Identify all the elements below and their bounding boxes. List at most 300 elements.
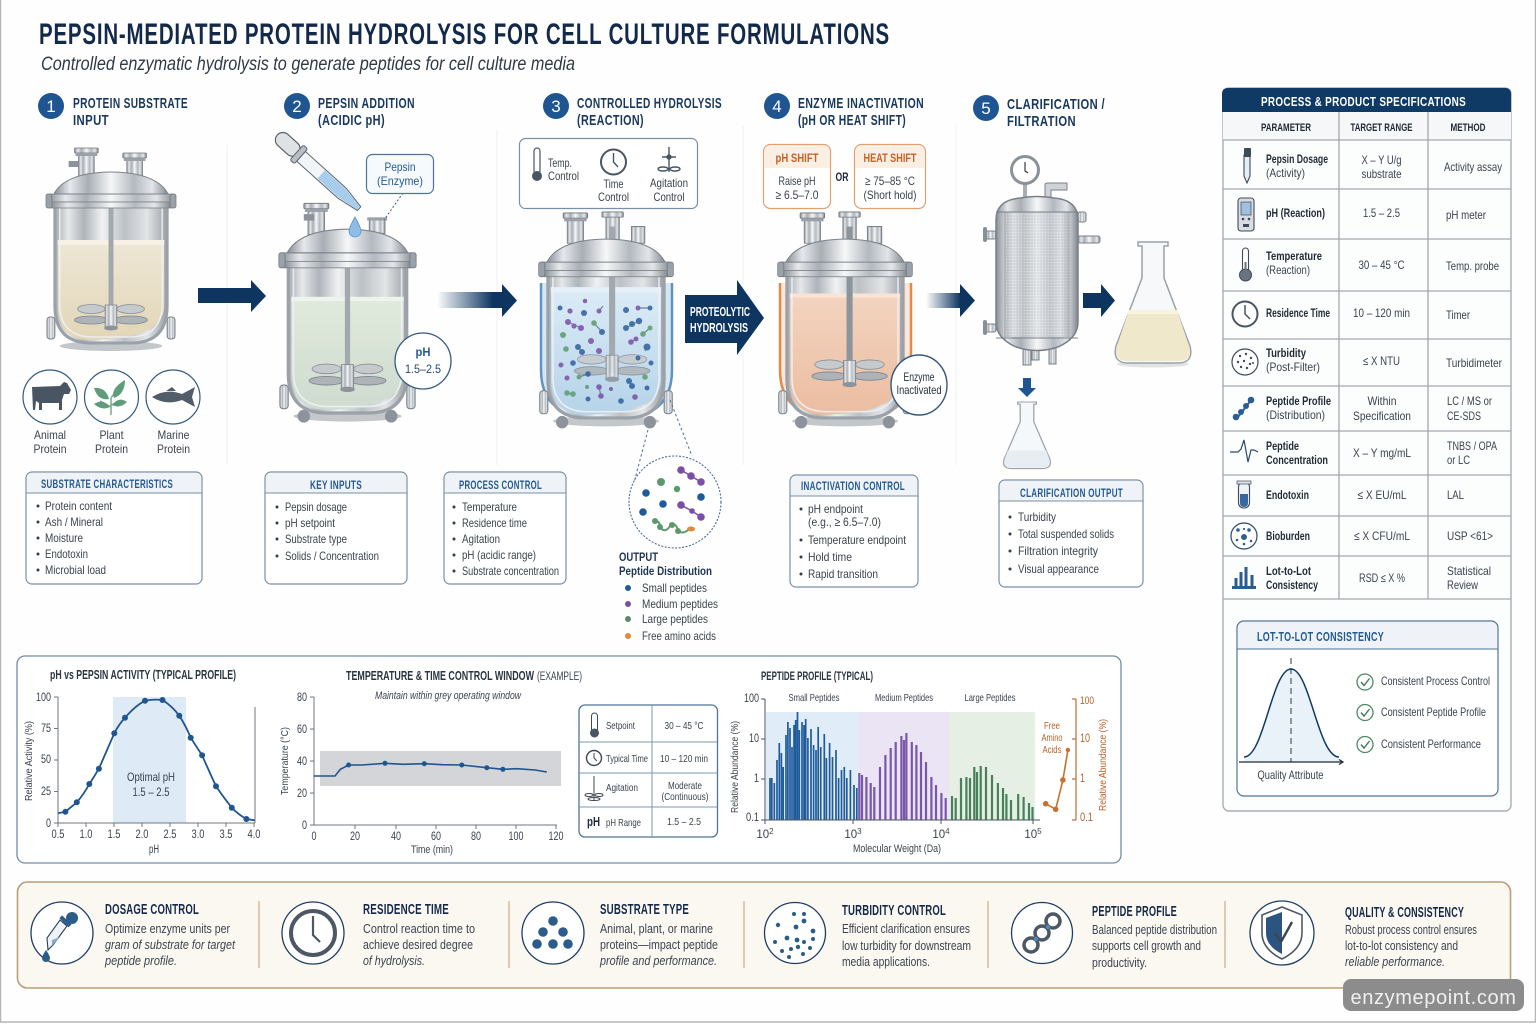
table: operating window (579, 705, 718, 837)
panel: inactivation control: pH endpoint (808, 502, 864, 516)
chart: temperature and time window: 20 (297, 788, 307, 800)
title: PEPSIN-MEDIATED PROTEIN HYDROLYSIS FOR CELL CULTURE FORMULATIONS (39, 18, 890, 51)
protein labels: Marine (158, 428, 190, 442)
pH shift box: ≥ 6.5–7.0 (776, 188, 819, 202)
chart: peptide profile: 5 (1037, 827, 1042, 836)
down arrow (1018, 378, 1036, 397)
chart: pH vs pepsin activity: 2.0 (136, 829, 148, 841)
table header bar: PROCESS & PRODUCT SPECIFICATIONS (1261, 94, 1466, 109)
chart: pH vs pepsin activity: 3.5 (220, 829, 232, 841)
chart: pH vs pepsin activity (23, 668, 260, 856)
icon: setpoint thermometer (590, 713, 599, 738)
chart: pH vs pepsin activity: 1.5 (108, 829, 120, 841)
item: peptide profile: PEPTIDE PROFILE (1092, 904, 1177, 920)
heat shift box: (Short hold) (864, 188, 916, 202)
icon: agitation (585, 776, 603, 800)
step 3 heading (543, 93, 722, 129)
panel: substrate characteristics (26, 472, 202, 584)
panel: key inputs (265, 472, 407, 584)
chart: peptide profile: Medium Peptides (875, 692, 933, 704)
icon: clock (601, 150, 626, 174)
panel: reaction controls: Control (654, 190, 684, 204)
panel: charts (17, 656, 1121, 863)
protein labels: Protein (95, 442, 128, 456)
step 4 heading: 4 (772, 97, 782, 116)
panel: process control: PROCESS CONTROL (459, 480, 542, 492)
table header bar (1222, 88, 1511, 112)
item: peptide profile: productivity. (1092, 955, 1147, 970)
item: residence time (282, 902, 475, 968)
item: turbidity control: media applications. (842, 954, 930, 969)
item: substrate type: proteins—impact peptide (600, 937, 718, 952)
step 3 heading: (REACTION) (577, 112, 644, 129)
icon: thermometer (532, 148, 542, 181)
chart: temperature and time window: 120 (548, 831, 564, 843)
step 4 heading: (pH OR HEAT SHIFT) (798, 112, 906, 129)
row: pepsin dosage: X – Y U/g (1362, 153, 1402, 167)
column headers: PARAMETER (1261, 122, 1311, 134)
big flask (1115, 242, 1191, 368)
panel: process control: Temperature (462, 500, 517, 514)
item: turbidity control: TURBIDITY CONTROL (842, 903, 946, 919)
panel: clarification output: Total suspended solids (1018, 527, 1114, 541)
panel: lot-to-lot consistency (1237, 621, 1498, 796)
chart: peptide profile: 2 (769, 827, 774, 836)
arrow: proteolytic hydrolysis: PROTEOLYTIC (690, 305, 750, 319)
icon: typical time clock (586, 750, 602, 766)
row: bioburden (1231, 523, 1493, 549)
step 2 heading: 2 (292, 97, 302, 116)
row: endotoxin: Endotoxin (1266, 488, 1309, 502)
row: endotoxin: LAL (1447, 488, 1464, 502)
step 1 heading: INPUT (73, 112, 109, 129)
chart: temperature and time window: Time (min) (411, 844, 453, 856)
callout: pH range (395, 333, 451, 389)
panel: key inputs: Substrate type (285, 532, 347, 546)
chart: temperature and time window: 40 (297, 756, 307, 768)
item: substrate type: profile and performance. (599, 953, 717, 968)
row: temperature: Temperature (1266, 249, 1322, 263)
item: peptide profile: supports cell growth and (1092, 938, 1201, 953)
chart: pH vs pepsin activity: 4.0 (248, 829, 260, 841)
row: lot-to-lot consistency: RSD ≤ X % (1359, 571, 1405, 585)
chart: peptide profile (729, 671, 1109, 855)
panel: substrate characteristics: SUBSTRATE CHARACTERISTICS (41, 479, 173, 491)
chart: peptide profile: 100 (1080, 695, 1094, 707)
heat shift box: HEAT SHIFT (864, 151, 917, 165)
reactor 3: controlled hydrolysis (539, 212, 673, 428)
chart: temperature and time window: Temperature (°C) (279, 727, 291, 795)
chart: peptide profile: 100 (744, 693, 759, 705)
row: pepsin dosage: Pepsin Dosage (1266, 152, 1328, 166)
panel: inactivation control (790, 475, 918, 587)
icon: marine protein (146, 370, 200, 424)
arrow 2 (437, 284, 517, 317)
chart: temperature and time window: 100 (508, 831, 524, 843)
subtitle: Controlled enzymatic hydrolysis to generate peptides for cell culture media (41, 54, 575, 75)
row: turbidity: Turbidity (1266, 346, 1306, 360)
row: pH reaction: 1.5 – 2.5 (1363, 206, 1400, 220)
chart: peptide profile: Small Peptides (788, 692, 840, 704)
checklist (1357, 674, 1490, 752)
row: turbidity: Turbidimeter (1446, 356, 1502, 370)
table: operating window: Typical Time (606, 753, 648, 765)
row: peptide concentration: Concentration (1266, 453, 1328, 467)
panel: inactivation control: INACTIVATION CONTROL (801, 481, 905, 493)
row: peptide concentration: Peptide (1266, 439, 1299, 453)
step 4 heading: ENZYME INACTIVATION (798, 95, 924, 112)
chart: peptide profile: 0.1 (1080, 812, 1093, 824)
row: temperature (1240, 248, 1499, 281)
panel: process control: Residence time (462, 516, 527, 530)
magnifier dashed guides (632, 400, 692, 490)
chart: temperature and time window: 0 (312, 831, 316, 843)
row: temperature: (Reaction) (1266, 263, 1310, 277)
panel: clarification output: Turbidity (1018, 510, 1056, 524)
arrow 4 (926, 284, 975, 317)
item: substrate type: SUBSTRATE TYPE (600, 902, 689, 918)
panel: process control: pH (acidic range) (462, 548, 536, 562)
item: dosage control: DOSAGE CONTROL (105, 902, 199, 918)
chart: peptide profile: Free (1044, 720, 1060, 732)
row: turbidity: (Post-Filter) (1266, 360, 1320, 374)
panel: clarification output: Visual appearance (1018, 562, 1099, 576)
panel: clarification output: Filtration integrity (1018, 544, 1098, 558)
row: turbidity (1232, 346, 1502, 375)
icon: pepsin dropper (271, 128, 366, 216)
row: peptide profile: (Distribution) (1266, 408, 1325, 422)
protein labels: Animal (34, 428, 66, 442)
step 1 heading: 1 (46, 97, 56, 116)
chart: pH vs pepsin activity: 0.5 (52, 829, 64, 841)
row: lot-to-lot consistency: Review (1447, 578, 1478, 592)
arrow: proteolytic hydrolysis: HYDROLYSIS (690, 321, 748, 335)
chart: peptide profile: Relative Abundance (%) (729, 721, 741, 813)
icon: dropper (31, 902, 93, 964)
chart: peptide profile: 1 (754, 773, 759, 785)
row: residence time: Timer (1446, 308, 1470, 322)
panel: substrate characteristics: Ash / Mineral (45, 515, 103, 529)
chart: temperature and time window: 40 (391, 831, 401, 843)
panel: inactivation control: Temperature endpoint (808, 533, 907, 547)
step 1 heading (38, 93, 188, 129)
chart: pH vs pepsin activity: 25 (41, 786, 51, 798)
reactor 2: pepsin addition (279, 203, 416, 423)
step 2 heading: (ACIDIC pH) (318, 112, 385, 129)
item: quality and consistency: Robust process control ensures (1345, 922, 1477, 937)
output legend: Free amino acids (642, 629, 716, 643)
chart: pH vs pepsin activity: 2.5 (164, 829, 176, 841)
chart: pH vs pepsin activity: 1.0 (80, 829, 92, 841)
callout: pepsin enzyme (366, 154, 434, 220)
panel: key inputs: pH setpoint (285, 516, 336, 530)
pH shift box: pH SHIFT (776, 151, 819, 165)
icon: particles (764, 902, 826, 964)
panel: inactivation control: Hold time (808, 550, 852, 564)
step 5 heading (973, 95, 1105, 130)
icon: chain (1012, 902, 1072, 964)
item: turbidity control: Efficient clarification ensures (842, 921, 970, 936)
item: residence time: RESIDENCE TIME (363, 902, 449, 918)
chart: peptide profile: Molecular Weight (Da) (853, 843, 941, 855)
item: quality and consistency (1250, 901, 1477, 969)
row: pepsin dosage: (Activity) (1266, 166, 1305, 180)
row: bioburden: USP <61> (1447, 529, 1493, 543)
watermark: enzymepoint.com (1350, 987, 1516, 1009)
panel: reaction controls: Temp. (548, 156, 572, 170)
row: lot-to-lot consistency: Statistical (1447, 564, 1491, 578)
item: residence time: of hydrolysis. (363, 953, 425, 968)
chart: peptide profile: Relative Abundance (%) (1097, 719, 1109, 811)
chart: peptide profile: 10 (756, 829, 769, 841)
row: pepsin dosage (1244, 148, 1502, 183)
panel: process control: Substrate concentration (462, 564, 559, 578)
chart: temperature and time window: 60 (431, 831, 441, 843)
item: dosage control: peptide profile. (104, 953, 177, 968)
row: lot-to-lot consistency: Consistency (1266, 578, 1318, 592)
output legend: Peptide Distribution (619, 564, 712, 578)
chart: peptide profile: 10 (844, 829, 857, 841)
item: turbidity control: low turbidity for downstream (842, 938, 971, 953)
output legend: OUTPUT (619, 550, 659, 564)
row: lot-to-lot consistency (1232, 564, 1491, 592)
table: operating window: Moderate (668, 780, 702, 792)
chart: peptide profile: Large Peptides (964, 692, 1016, 704)
chart: pH vs pepsin activity: 1.5 – 2.5 (132, 785, 170, 799)
chart: peptide profile: 3 (857, 827, 862, 836)
chart: temperature and time window: TEMPERATURE & TIME CONTROL WINDOW (346, 669, 534, 683)
row: peptide profile: Peptide Profile (1266, 394, 1331, 408)
row: bioburden: ≤ X CFU/mL (1354, 529, 1410, 543)
table: operating window: 30 – 45 °C (664, 720, 704, 732)
chart: peptide profile: 10 (932, 829, 945, 841)
bell curve (1239, 658, 1343, 782)
filter housing (983, 156, 1100, 365)
item: quality and consistency: reliable performance. (1345, 954, 1445, 969)
chart: peptide profile: 4 (945, 827, 950, 836)
panel: key control takeaways (18, 882, 1510, 988)
row: residence time: Residence Time (1266, 306, 1330, 320)
chart: pH vs pepsin activity: pH (149, 844, 159, 856)
panel: lot-to-lot consistency: LOT-TO-LOT CONSISTENCY (1257, 629, 1384, 644)
panel: reaction controls: Control (548, 169, 579, 183)
step 1 heading: PROTEIN SUBSTRATE (73, 95, 188, 112)
checklist: Consistent Performance (1381, 737, 1481, 751)
chart: peptide profile: 10 (1080, 733, 1090, 745)
table: operating window: Setpoint (606, 720, 635, 732)
chart: peptide profile: 1 (1080, 773, 1085, 785)
arrow: proteolytic hydrolysis (685, 280, 764, 355)
callout: enzyme inactivated: Enzyme (904, 370, 935, 384)
bell curve: Quality Attribute (1258, 768, 1324, 782)
pH shift box: Raise pH (778, 174, 816, 188)
table: operating window: (Continuous) (662, 791, 708, 803)
panel: reaction controls: Time (604, 177, 624, 191)
output legend: Small peptides (642, 581, 707, 595)
step 5 heading: CLARIFICATION / (1007, 96, 1105, 113)
arrow 5 (1083, 284, 1115, 317)
chart: pH vs pepsin activity: Relative Activity (%) (23, 721, 35, 801)
panel: key inputs: Pepsin dosage (285, 500, 347, 514)
item: peptide profile: Balanced peptide distribution (1092, 922, 1217, 937)
output legend: Large peptides (642, 612, 708, 626)
heat shift box (854, 144, 926, 208)
column headers: METHOD (1450, 122, 1486, 134)
row: bioburden: Bioburden (1266, 529, 1310, 543)
item: quality and consistency: QUALITY & CONSISTENCY (1345, 905, 1464, 921)
chart: pH vs pepsin activity: 75 (41, 723, 51, 735)
chart: peptide profile: 10 (1024, 829, 1037, 841)
panel: key inputs: Solids / Concentration (285, 549, 379, 563)
table: operating window: 10 – 120 min (660, 753, 708, 765)
panel: process control (444, 472, 566, 584)
chart: pH vs pepsin activity: 0 (46, 818, 51, 830)
icon: clock (282, 902, 344, 964)
row: pH reaction (1238, 198, 1486, 231)
row: peptide concentration: X – Y mg/mL (1353, 446, 1411, 460)
OR label: OR (836, 170, 849, 184)
step 5 heading: FILTRATION (1007, 113, 1076, 130)
step 4 heading (764, 93, 924, 129)
row: pH reaction: pH meter (1446, 208, 1486, 222)
chart: peptide profile: 0.1 (746, 812, 759, 824)
step 3 heading: CONTROLLED HYDROLYSIS (577, 95, 722, 112)
panel: reaction controls: Agitation (650, 176, 688, 190)
output legend: Medium peptides (642, 597, 718, 611)
table: operating window: Agitation (606, 782, 638, 794)
column headers: TARGET RANGE (1350, 122, 1412, 134)
chart: pH vs pepsin activity: 50 (41, 754, 51, 766)
output legend (619, 550, 718, 643)
row: peptide concentration: or LC (1447, 453, 1470, 467)
reactor 1: protein substrate (46, 148, 176, 351)
row: residence time: 10 – 120 min (1353, 306, 1410, 320)
row: endotoxin: ≤ X EU/mL (1358, 488, 1407, 502)
small flask (1004, 402, 1050, 469)
row: endotoxin (1237, 481, 1464, 508)
chart: temperature and time window: 0 (302, 820, 307, 832)
chart: peptide profile: Acids (1042, 744, 1062, 756)
callout: pepsin enzyme: (Enzyme) (377, 174, 423, 188)
chart: temperature and time window: 80 (471, 831, 481, 843)
row: peptide concentration: TNBS / OPA (1447, 439, 1497, 453)
row: temperature: Temp. probe (1446, 259, 1499, 273)
item: residence time: Control reaction time to (363, 921, 475, 936)
callout: pepsin enzyme: Pepsin (384, 160, 416, 174)
table: operating window: pH Range (606, 817, 641, 829)
protein labels: Protein (34, 442, 66, 456)
item: residence time: achieve desired degree (363, 937, 473, 952)
heat shift box: ≥ 75–85 °C (865, 174, 915, 188)
chart: pH vs pepsin activity: Optimal pH (127, 770, 175, 784)
step 2 heading (284, 93, 415, 129)
chart: temperature and time window: (EXAMPLE) (537, 671, 582, 683)
protein labels: Protein (157, 442, 190, 456)
row: pepsin dosage: substrate (1362, 167, 1402, 181)
checklist: Consistent Process Control (1381, 674, 1490, 688)
row: lot-to-lot consistency: Lot-to-Lot (1266, 564, 1311, 578)
icon: agitator (658, 147, 680, 172)
icon: plant protein (84, 370, 138, 424)
item: peptide profile (1012, 902, 1217, 970)
step 5 heading: 5 (981, 99, 991, 118)
chart: temperature and time window: 60 (297, 724, 307, 736)
item: dosage control (31, 902, 236, 968)
watermark (1343, 979, 1524, 1011)
icon: dots (522, 902, 584, 964)
row: peptide profile: Within (1368, 394, 1396, 408)
protein labels: Plant (100, 428, 124, 442)
panel: inactivation control: Rapid transition (808, 567, 878, 581)
panel: process and product specifications (1222, 88, 1511, 811)
column headers (1261, 122, 1486, 134)
chart: temperature and time window (279, 669, 582, 856)
chart: temperature and time window: Maintain within grey operating window (375, 690, 522, 702)
icon: shield (1250, 901, 1314, 965)
callout: enzyme inactivated: Inactivated (896, 383, 942, 397)
table: operating window: 1.5 – 2.5 (667, 816, 701, 828)
panel: substrate characteristics: Moisture (45, 531, 83, 545)
checklist: Consistent Peptide Profile (1381, 705, 1486, 719)
chart: pH vs pepsin activity: 100 (36, 692, 51, 704)
protein labels (34, 428, 190, 456)
row: peptide profile: Specification (1353, 409, 1411, 423)
chart: peptide profile: 10 (749, 733, 759, 745)
row: pepsin dosage: Activity assay (1444, 160, 1502, 174)
item: substrate type: Animal, plant, or marine (600, 921, 713, 936)
row: residence time (1232, 302, 1470, 326)
step 2 heading: PEPSIN ADDITION (318, 95, 415, 112)
callout: pH range: pH (416, 345, 430, 359)
chart: temperature and time window: 80 (297, 692, 307, 704)
item: turbidity control (764, 902, 971, 969)
chart: pH vs pepsin activity: 3.0 (192, 829, 204, 841)
chart: pH vs pepsin activity: pH vs PEPSIN ACTIVITY (TYPICAL PROFILE) (50, 668, 236, 682)
row: peptide profile: CE-SDS (1447, 409, 1481, 423)
panel: process control: Agitation (462, 532, 500, 546)
row: peptide profile (1233, 394, 1492, 423)
arrow 1 (198, 280, 266, 312)
row: temperature: 30 – 45 °C (1358, 258, 1405, 272)
panel: substrate characteristics: Protein content (45, 499, 113, 513)
callout: enzyme inactivated (891, 355, 947, 415)
row: peptide profile: LC / MS or (1447, 394, 1492, 408)
chart: peptide profile: Amino (1042, 732, 1063, 744)
item: dosage control: Optimize enzyme units per (105, 921, 231, 936)
chart: temperature and time window: 20 (350, 831, 360, 843)
panel: clarification output: CLARIFICATION OUTPUT (1020, 488, 1123, 500)
step 3 heading: 3 (551, 97, 561, 116)
reactor 4: enzyme inactivation (778, 212, 912, 428)
table: operating window: pH (587, 815, 600, 829)
row: peptide concentration (1230, 439, 1497, 467)
icon: animal protein (23, 370, 77, 424)
pH shift box (764, 144, 830, 208)
item: substrate type (522, 902, 718, 968)
callout: pH range: 1.5–2.5 (405, 362, 441, 376)
item: dosage control: gram of substrate for target (105, 937, 236, 952)
row: pH reaction: pH (Reaction) (1266, 206, 1325, 220)
panel: substrate characteristics: Endotoxin (45, 547, 88, 561)
icon: drop (349, 217, 361, 237)
item: quality and consistency: lot-to-lot consistency and (1345, 938, 1458, 953)
panel: inactivation control: (e.g., ≥ 6.5–7.0) (808, 515, 881, 529)
panel: clarification output (999, 480, 1143, 587)
panel: substrate characteristics: Microbial load (45, 563, 106, 577)
row: turbidity: ≤ X NTU (1363, 354, 1400, 368)
panel: reaction controls (520, 138, 698, 208)
chart: peptide profile: PEPTIDE PROFILE (TYPICAL) (761, 671, 873, 683)
